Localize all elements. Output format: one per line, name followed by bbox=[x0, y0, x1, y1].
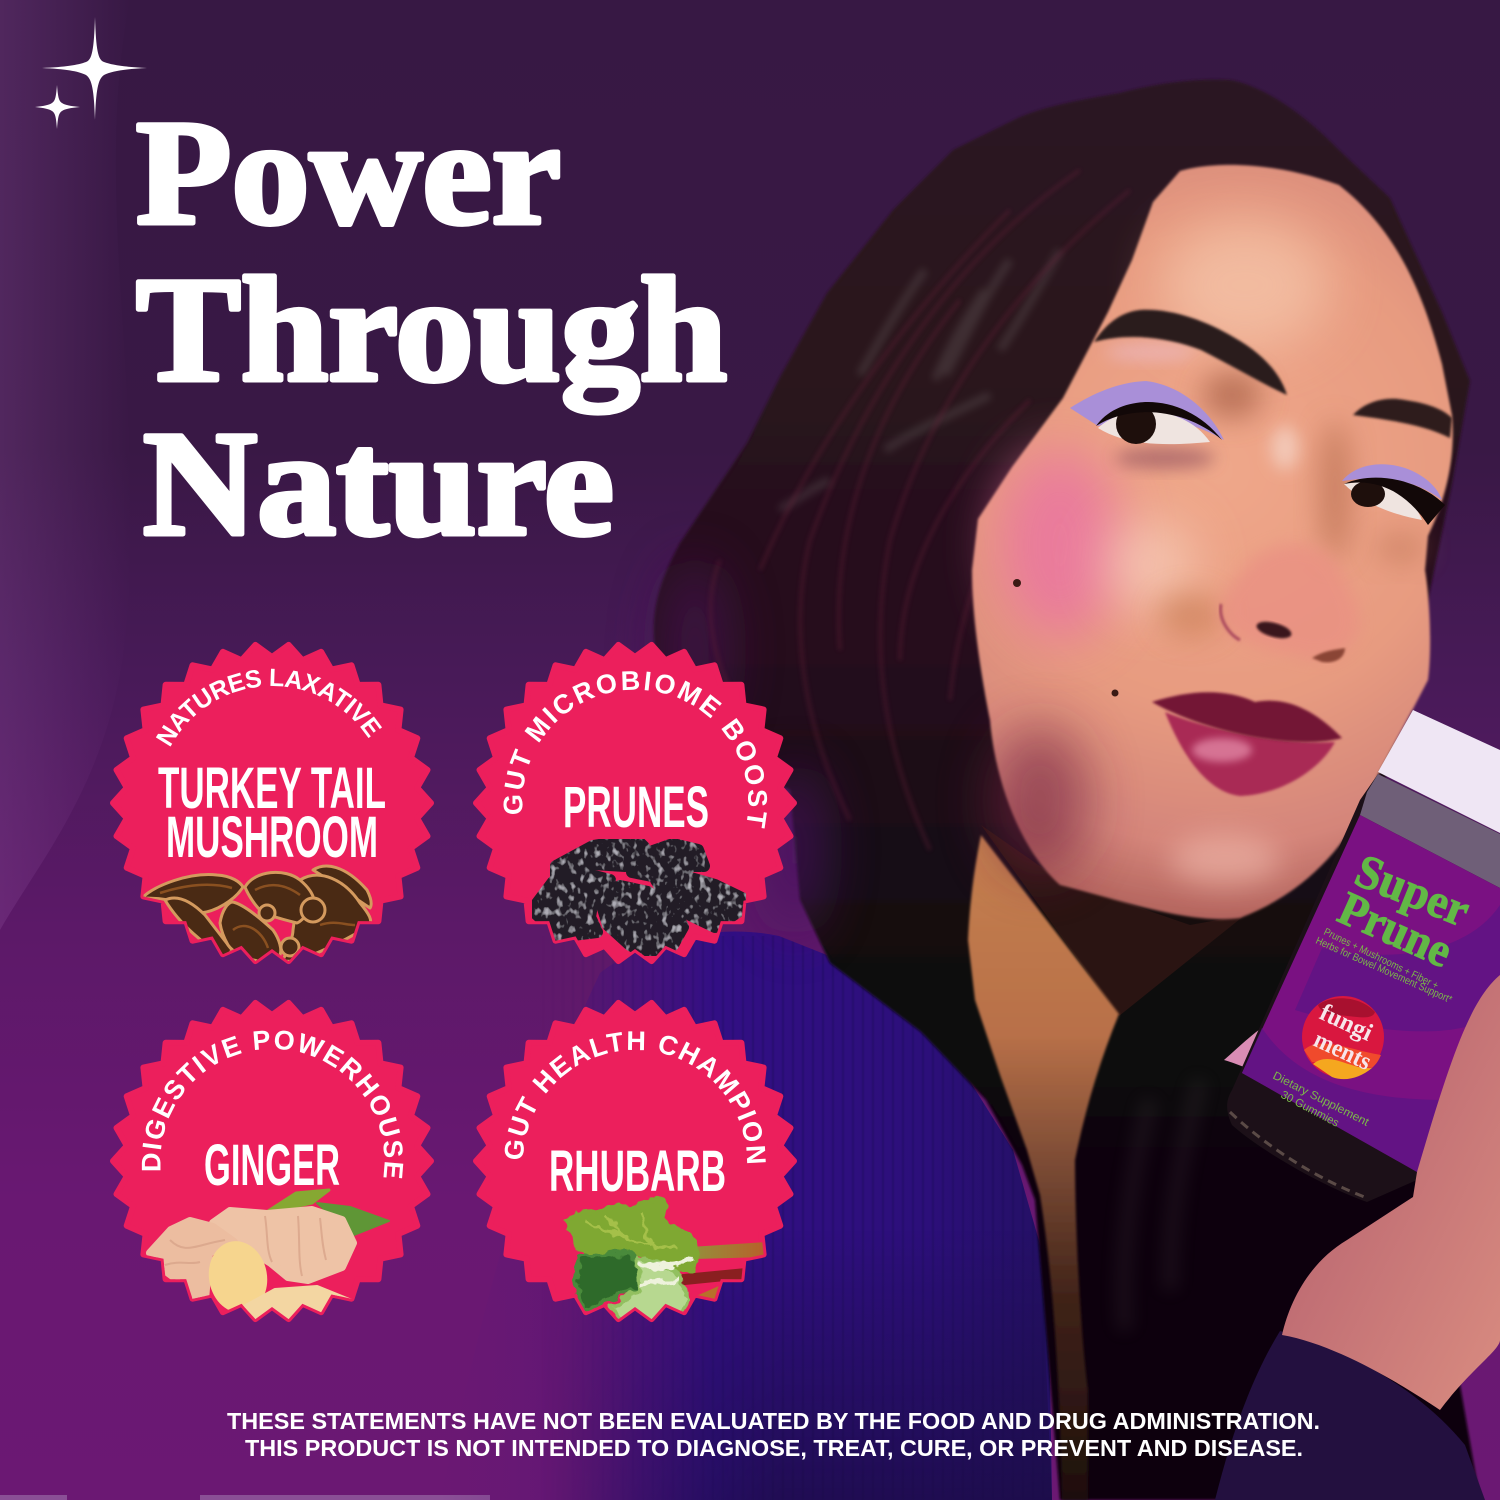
nose bbox=[1221, 544, 1359, 662]
label bbox=[1242, 815, 1500, 1172]
jaw shading bbox=[990, 725, 1090, 875]
lip gloss bbox=[1192, 738, 1252, 762]
badge: prunes bbox=[473, 642, 797, 964]
eye left bbox=[1070, 381, 1224, 444]
eye right bbox=[1342, 464, 1445, 525]
hair bbox=[654, 80, 1480, 1500]
disclaimer: THESE STATEMENTS HAVE NOT BEEN EVALUATED BY THE FOOD AND DRUG ADMINISTRATION. bbox=[227, 1408, 1320, 1434]
cheek highlight bbox=[1105, 520, 1195, 610]
icon: rhubarb bbox=[566, 1197, 767, 1322]
upper lip bbox=[1152, 692, 1342, 742]
hair strands bbox=[711, 170, 1130, 850]
brand logo: ments bbox=[1309, 1026, 1375, 1076]
badge: turkey tail mushroom: MUSHROOM bbox=[166, 805, 378, 870]
jar body bbox=[1227, 774, 1500, 1202]
product name bbox=[1331, 844, 1477, 978]
moles bbox=[1013, 579, 1118, 696]
blush bbox=[998, 450, 1122, 640]
brow bone pink bbox=[1105, 343, 1195, 361]
title: Through bbox=[136, 247, 727, 413]
chin light bbox=[1170, 835, 1280, 885]
badge: ginger bbox=[110, 1000, 434, 1322]
lower lip bbox=[1165, 712, 1335, 796]
product name: Super bbox=[1348, 844, 1477, 937]
brand logo bbox=[1302, 996, 1384, 1079]
brand logo: fungi bbox=[1315, 999, 1377, 1047]
jar base glints bbox=[1230, 1112, 1367, 1198]
neck bbox=[968, 835, 1119, 1500]
supplement facts: 30 Gummies bbox=[1279, 1089, 1341, 1130]
title: Nature bbox=[143, 401, 614, 567]
icon: mushroom bbox=[142, 866, 371, 963]
eyebrow left bbox=[1094, 310, 1287, 395]
woman portrait bbox=[440, 80, 1485, 1500]
cap bbox=[1378, 710, 1500, 833]
eyebrow right bbox=[1353, 399, 1452, 438]
sweater bbox=[544, 932, 1052, 1500]
lower hair sheen bbox=[1124, 1080, 1200, 1330]
under-eye shadow bbox=[1115, 447, 1215, 469]
nails bbox=[1224, 1025, 1266, 1068]
neck shadow bbox=[981, 825, 1245, 1016]
icon: ginger bbox=[150, 1190, 389, 1323]
name: TURKEY TAIL bbox=[158, 756, 386, 821]
sparkles bbox=[35, 17, 147, 129]
title: Power bbox=[136, 90, 561, 256]
badge: rhubarb bbox=[473, 1000, 797, 1322]
title bbox=[136, 90, 727, 567]
icon: prunes bbox=[532, 839, 746, 956]
face bbox=[972, 165, 1453, 919]
product description: Herbs for Bowel Movement Support* bbox=[1314, 935, 1454, 1006]
cheek fold shadow bbox=[1158, 593, 1222, 637]
name: GINGER bbox=[204, 1133, 340, 1198]
sleeve bbox=[1215, 1331, 1485, 1500]
arc text: GUT HEALTH CHAMPION bbox=[504, 1031, 766, 1164]
badge: turkey tail mushroom bbox=[110, 642, 434, 964]
arc text: NATURES LAXATIVE bbox=[156, 668, 382, 746]
jar neck bbox=[1360, 774, 1500, 888]
supplement facts: Dietary Supplement bbox=[1271, 1070, 1371, 1129]
product description: Prunes + Mushrooms + Fiber + bbox=[1322, 926, 1440, 992]
name: PRUNES bbox=[563, 775, 709, 840]
disclaimer bbox=[227, 1408, 1320, 1461]
nose side shadow bbox=[1319, 420, 1351, 560]
label waves bbox=[1242, 905, 1500, 1172]
disclaimer: THIS PRODUCT IS NOT INTENDED TO DIAGNOSE, TREAT, CURE, OR PREVENT AND DISEASE. bbox=[245, 1435, 1303, 1461]
hair highlights bbox=[780, 250, 1060, 510]
hand holding bottle bbox=[1282, 975, 1500, 1410]
eye socket shadow bbox=[1202, 371, 1262, 419]
arc text: GUT MICROBIOME BOOST bbox=[504, 671, 768, 828]
arc text: DIGESTIVE POWERHOUSE bbox=[142, 1030, 404, 1178]
forehead light bbox=[1160, 220, 1330, 350]
product name: Prune bbox=[1331, 882, 1460, 978]
nose bridge highlight bbox=[1271, 426, 1299, 470]
name: RHUBARB bbox=[549, 1139, 726, 1204]
supplement bottle bbox=[1227, 710, 1500, 1202]
